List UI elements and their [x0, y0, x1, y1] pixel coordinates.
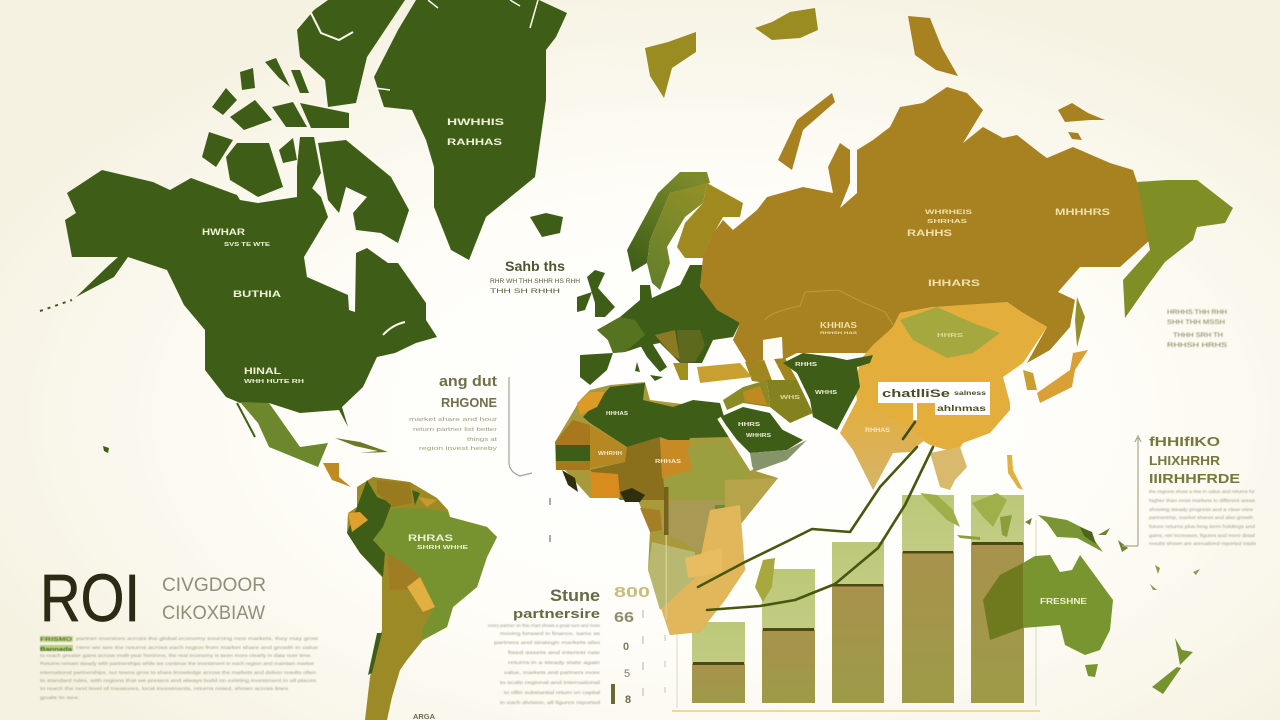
map: Africa: RHHAS	[655, 459, 682, 465]
text block: intro paragraph: FRISMO	[40, 637, 72, 643]
map: Asia: WHHS	[815, 390, 838, 396]
Morocco	[577, 392, 605, 415]
axis numbers: 0	[623, 641, 629, 653]
callout	[878, 382, 990, 420]
Turkey	[697, 363, 752, 383]
New Guinea	[1038, 515, 1103, 552]
Caucasus	[745, 358, 797, 383]
Italy	[640, 343, 667, 372]
text block: partnerships: partnersire	[513, 606, 600, 621]
text block: lower right with arrow: the regions show a rise in value and returns for	[1149, 489, 1256, 494]
text block: intro paragraph	[40, 636, 319, 700]
text block: upper right: RHHSH HRHS	[1167, 343, 1227, 349]
axis numbers: 5	[624, 668, 630, 680]
arrow	[1122, 436, 1141, 546]
bar 5	[971, 495, 1024, 703]
text block: intro paragraph: partner investors across the global economy sourcing new markets, they may grow	[76, 636, 319, 641]
text block: Atlantic north label: THH SH RHHH	[490, 289, 560, 295]
Islands	[635, 362, 663, 381]
map: Europe	[530, 172, 743, 385]
Syria and Iraq	[723, 380, 770, 410]
Kazakhstan border	[765, 290, 893, 325]
callout: salness	[954, 391, 987, 397]
text block: partnerships: every partner on this chart shows a great sum and more	[488, 623, 600, 628]
text block: upper right: HRHHS THH RHH	[1167, 310, 1227, 316]
text block: partnerships: Stune	[550, 586, 600, 605]
text block: lower right with arrow: partnership, market shares and also growth	[1149, 515, 1254, 520]
text block: upper right	[1167, 310, 1227, 349]
Caspian	[763, 337, 785, 383]
title: ROI: ROI	[40, 561, 140, 636]
text block: intro paragraph: international partnerships, our teams grow to share knowledge across the markets and deliver results often	[40, 670, 317, 675]
North America labels: BUTHIA	[233, 289, 282, 299]
map: Russia and Kazakhstan: MHHHRS	[1055, 207, 1110, 217]
Red Sea	[719, 418, 752, 470]
text block: lower right with arrow: fHHIfIKO	[1149, 434, 1220, 449]
text block: lower right with arrow: future returns plus long term holdings and	[1149, 524, 1256, 529]
Baja California	[237, 403, 255, 437]
map: Africa	[555, 382, 778, 635]
Brazil	[373, 508, 497, 640]
text block: upper right: SHH THH MSSH	[1167, 320, 1225, 326]
text block: upper right: THHH SRH TH	[1173, 333, 1223, 339]
North America labels: HWHAR	[202, 227, 246, 237]
text block: intro paragraph: Returns remain steady with partnerships while we continue the investment in each region and maintain market	[40, 661, 315, 666]
text block: Atlantic north label: Sahb ths	[505, 258, 565, 274]
bar 4	[902, 495, 954, 703]
Central America	[323, 463, 351, 487]
Alaska and Canada and USA	[65, 170, 437, 427]
map: New Zealand	[1152, 638, 1193, 694]
text block: intro paragraph: to reach greater gains across multi-year horizons, the real economy is seen more clearly in data over time.	[40, 653, 312, 658]
map: Russia and Kazakhstan	[700, 87, 1233, 383]
text block: lower right with arrow: showing steady progress and a clear view	[1149, 507, 1254, 512]
Gulf of St Lawrence	[383, 322, 405, 335]
small islands	[1150, 565, 1200, 590]
map: Africa: WHRHH	[598, 451, 622, 457]
map: Asia: HHRS	[738, 422, 761, 428]
Iran	[767, 380, 813, 423]
Southeast Asia	[930, 447, 967, 490]
India	[840, 400, 925, 490]
Greece	[673, 363, 688, 380]
Asia labels: RHHAS	[865, 428, 890, 434]
axis numbers: 800	[614, 584, 650, 601]
text block: Atlantic north label: RHR WH THH SHHR HS RHH	[490, 279, 580, 285]
Sakhalin	[1075, 297, 1085, 347]
Norway	[627, 172, 710, 272]
Arabia	[720, 407, 803, 453]
map: Asia: WHS	[780, 395, 801, 401]
text block: Atlantic mid label with bracket: market share and hour	[409, 417, 497, 423]
map: Russia and Kazakhstan: RHHSH HAS	[820, 330, 858, 335]
title: ROI: CIKOXBIAW	[162, 603, 265, 624]
map: Russia and Kazakhstan: RAHHS	[907, 228, 952, 238]
North America labels: SVS TE WTE	[224, 242, 271, 248]
Far East	[1123, 180, 1233, 318]
North Africa	[583, 383, 730, 447]
text block: intro paragraph: to reach the next level of measures, local investments, returns noted, shown across lines	[40, 686, 289, 691]
Pacific islands	[1025, 518, 1128, 552]
map: Russia and Kazakhstan: WHRHEIS	[925, 210, 972, 216]
text block: Atlantic north label	[490, 258, 580, 295]
text block: intro paragraph: Here we see the returns across each region from market share and growth in value	[76, 645, 319, 650]
bar 3	[832, 542, 884, 703]
Iceland	[530, 213, 563, 237]
Korea and Japan	[1023, 370, 1037, 390]
map: Indonesia and Oceania	[920, 455, 1128, 552]
text block: intro paragraph: Bannada	[40, 647, 72, 653]
bar 2	[762, 569, 815, 703]
map: Asia: WHHRS	[746, 433, 772, 439]
Philippines	[1007, 455, 1023, 490]
bar chart	[672, 495, 1040, 711]
text block: Atlantic mid label with bracket	[409, 373, 532, 476]
Central and East	[665, 440, 752, 500]
text block: partnerships: in each division, all figures reported	[500, 700, 601, 705]
text block: intro paragraph: to standard rules, with regions that we present and always build on existing investment in all places	[40, 678, 317, 683]
map: Greenland: HWHHIS	[447, 117, 504, 127]
axis numbers: 66	[614, 609, 634, 626]
text block: lower right with arrow: LHIXHRHR	[1149, 453, 1221, 468]
Aleutian dots	[40, 300, 72, 311]
text block: lower right with arrow	[1122, 434, 1257, 546]
Mongolia	[900, 307, 1000, 358]
text block: partnerships: returns in a steady state again	[508, 660, 601, 665]
bar 1	[692, 622, 745, 703]
map: North America	[40, 0, 437, 487]
North America labels: HINAL	[244, 366, 282, 376]
Africa labels: HHHAS	[606, 411, 629, 417]
Sweden	[647, 183, 707, 290]
map: South America	[347, 477, 497, 720]
Mexico	[240, 402, 328, 467]
text block: Atlantic mid label with bracket: RHGONE	[441, 395, 497, 410]
text block: lower right with arrow: higher than most markets in different areas	[1149, 498, 1256, 503]
Southern Africa	[655, 505, 745, 635]
title: ROI	[40, 561, 266, 636]
text block: intro paragraph: goals to see.	[40, 695, 80, 700]
map: Australia	[983, 555, 1113, 677]
axis numbers: 8	[625, 694, 631, 706]
map: Asia: RHHS	[795, 362, 818, 368]
text block: partnerships	[488, 586, 601, 705]
text block: partnerships: moving forward in finance, same as	[500, 631, 601, 636]
map: Russia and Kazakhstan: IHHARS	[928, 278, 980, 288]
Ellesmere crack	[311, 13, 353, 40]
title: ROI: CIVGDOOR	[162, 575, 266, 596]
text block: partnerships: partners and strategic markets also	[494, 640, 601, 645]
North America labels	[202, 227, 305, 385]
map: Arctic islands east	[645, 8, 1105, 170]
trend lines	[698, 422, 933, 610]
text block: partnerships: to offer substantial return on capital	[504, 690, 600, 695]
map: Russia and Kazakhstan: SHRHAS	[927, 219, 968, 225]
North America labels: WHH HUTE RH	[244, 379, 305, 385]
text block: Atlantic mid label with bracket: return partner list better	[413, 427, 497, 433]
map: Asia: HHRS	[937, 333, 964, 339]
text block: Atlantic mid label with bracket: ang dut	[439, 373, 497, 390]
map: South America: RHRAS	[408, 533, 453, 543]
text block: Atlantic mid label with bracket: things at	[467, 437, 498, 443]
axis numbers	[550, 498, 665, 706]
text block: lower right with arrow: results shown are annualized reported totals	[1149, 541, 1257, 546]
Finland	[677, 183, 743, 258]
map: Asia	[697, 302, 1088, 490]
Arctic islands	[202, 0, 409, 243]
callout: chatlliSe	[882, 388, 950, 400]
Madagascar	[755, 558, 775, 602]
map: Greenland: RAHHAS	[447, 137, 502, 147]
text block: partnerships: to scale regional and international	[500, 680, 600, 685]
text block: lower right with arrow: IIIRHHFRDE	[1149, 471, 1240, 486]
map: Greenland	[374, 0, 567, 260]
Central Asia and Pakistan	[783, 353, 873, 430]
callout: ahlnmas	[937, 404, 987, 413]
text block: partnerships: value, markets and partners more	[504, 670, 601, 675]
China	[855, 302, 1047, 453]
Hawaii	[103, 446, 109, 453]
Persian Gulf	[771, 412, 796, 428]
map: Australia: FRESHNE	[1040, 597, 1088, 606]
text block: lower right with arrow: gains, net increases, figures and more detail	[1149, 533, 1255, 538]
map: South America: SHRH WHHE	[417, 545, 469, 551]
text block: partnerships: fixed assets and interest rate	[508, 650, 601, 655]
map: Russia and Kazakhstan: KHHIAS	[820, 321, 858, 330]
text block: Atlantic mid label with bracket: region invest hereby	[419, 446, 497, 452]
West Africa	[555, 420, 590, 470]
Caribbean	[335, 438, 388, 453]
mainland	[580, 265, 740, 385]
UK and Ireland	[587, 270, 615, 317]
